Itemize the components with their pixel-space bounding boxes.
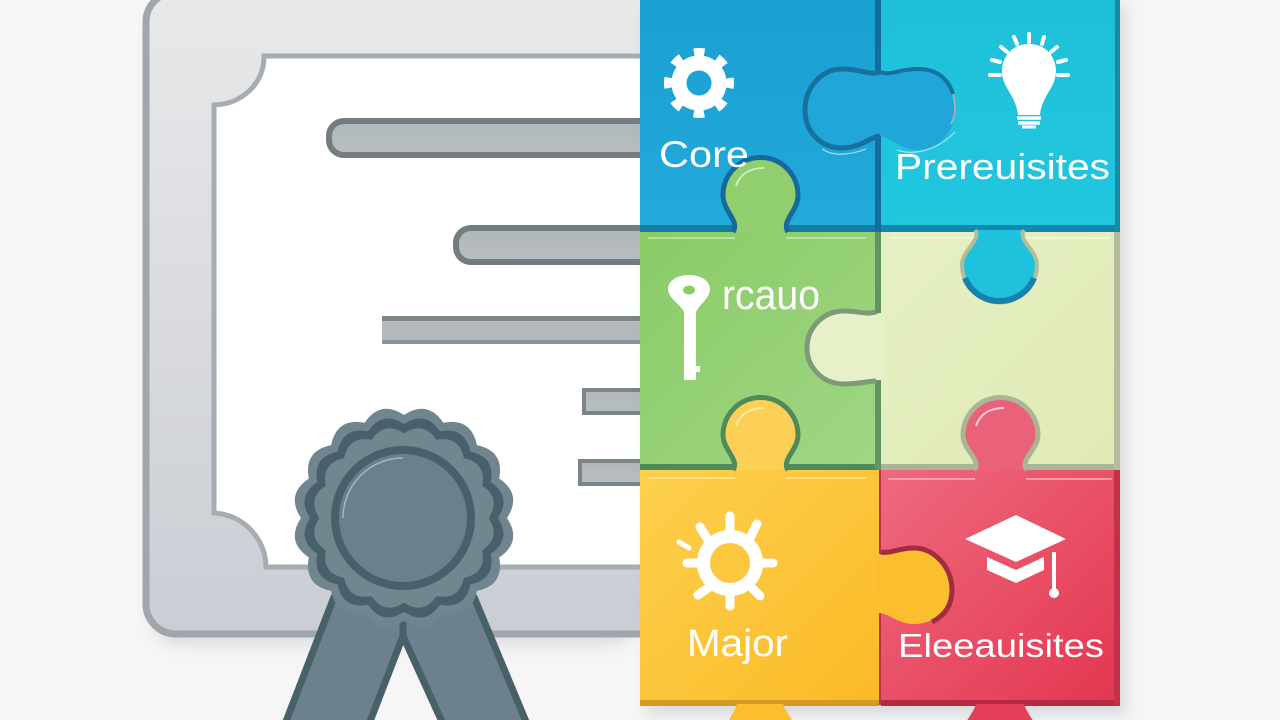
text line 5 <box>580 461 660 484</box>
joint: blue tab <box>805 69 955 154</box>
seal dark ring <box>304 418 504 618</box>
certificate frame <box>146 0 746 634</box>
tab: yellow top <box>723 398 798 470</box>
piece: core <box>640 0 955 232</box>
label: core: Core <box>659 134 749 175</box>
piece: major <box>640 398 879 720</box>
seal scalloped edge <box>295 409 513 627</box>
seal ribbons <box>285 597 527 720</box>
label: major: Major <box>687 623 788 665</box>
text line 1 <box>329 121 669 155</box>
tab: red top <box>963 398 1038 470</box>
piece: green tab <box>723 158 798 232</box>
tab: yellow right <box>876 548 952 624</box>
text line 2 <box>456 228 676 262</box>
icon: sun gear <box>679 516 773 606</box>
tab: red bottom <box>966 704 1034 720</box>
icon: graduation cap <box>965 515 1066 598</box>
panel: certificate <box>146 0 746 646</box>
tab: yellow bottom <box>728 704 793 720</box>
piece: prerequisites <box>881 0 1120 232</box>
seal inner scallop <box>314 428 494 608</box>
label: prerequisites: Prereuisites <box>895 146 1110 187</box>
piece: pale <box>807 232 1120 470</box>
piece: cyan tab <box>962 230 1037 302</box>
panel: puzzle <box>640 0 1126 720</box>
certificate inner page <box>214 56 700 567</box>
icon: ribbon seal <box>285 409 527 720</box>
icon: key <box>668 275 710 380</box>
icon: light bulb <box>990 34 1068 127</box>
label: electives: Eleeauisites <box>898 627 1104 664</box>
piece: electives <box>876 398 1120 720</box>
text line 4 <box>584 390 664 413</box>
centre seam <box>878 470 882 705</box>
text line 3 <box>382 316 662 344</box>
icon: gear <box>670 54 728 112</box>
piece: key panel <box>640 232 881 470</box>
joint: pale tab <box>807 311 884 384</box>
label: key panel: rcauo <box>722 271 820 318</box>
seal centre disc <box>335 450 471 586</box>
